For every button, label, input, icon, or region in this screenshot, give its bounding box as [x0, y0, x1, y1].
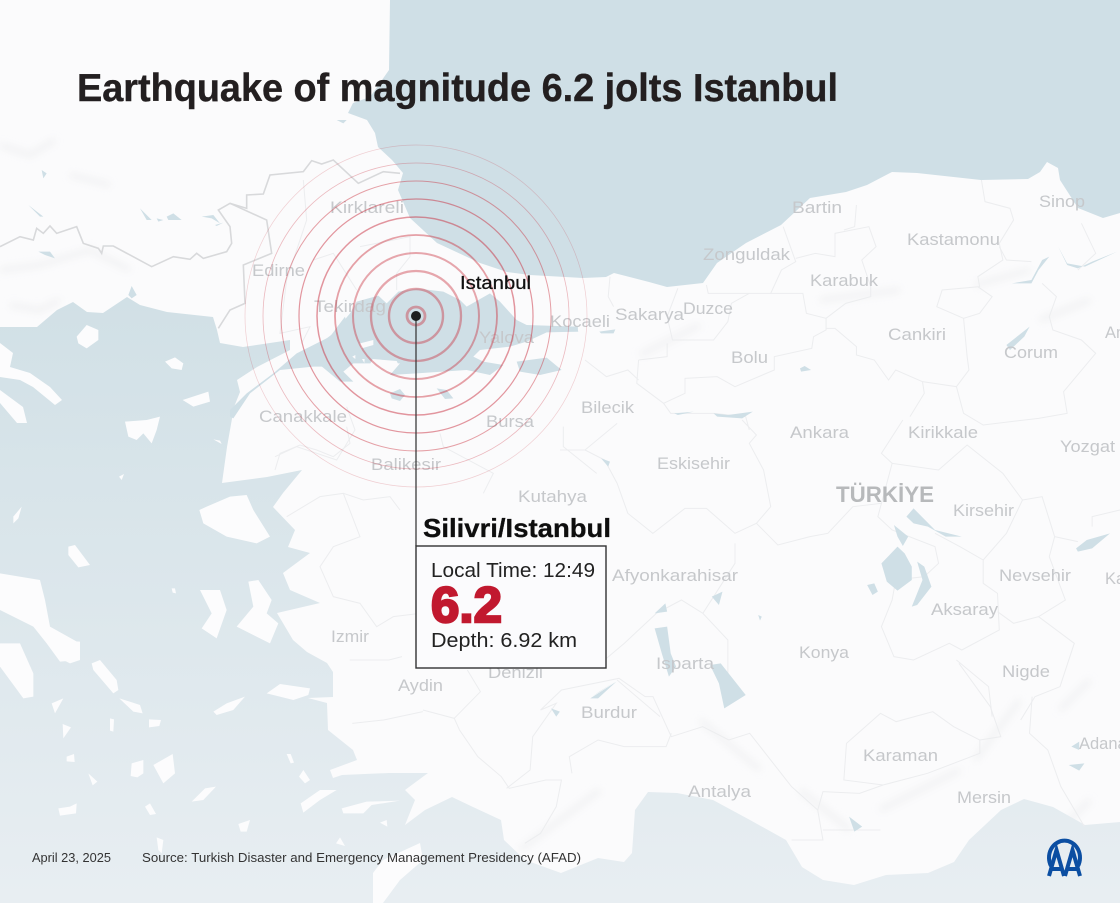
map: Black Sea	[348, 0, 1120, 287]
city labels: Nevsehir	[999, 567, 1072, 585]
city labels: Bilecik	[581, 399, 635, 417]
city labels: Karabuk	[810, 272, 879, 290]
city labels: Sinop	[1039, 193, 1085, 211]
city labels: Nigde	[1002, 663, 1050, 681]
label: Istanbul: Istanbul	[460, 273, 531, 293]
city labels: Karaman	[863, 747, 938, 765]
city labels: Kocaeli	[550, 313, 610, 331]
map: Rhodes	[373, 843, 423, 903]
country label: Türkiye: TÜRKİYE	[836, 482, 934, 507]
city labels: Kirsehir	[953, 502, 1015, 520]
map: hillshade	[0, 140, 1090, 850]
source: Source: Turkish Disaster and Emergency Management Presidency (AFAD)	[142, 850, 581, 865]
city labels: Yalova	[479, 329, 535, 347]
map: Sea of Marmara	[320, 288, 578, 401]
map: Dardanelles	[230, 317, 350, 418]
magnitude: 6.2	[431, 577, 502, 633]
city labels: Yozgat	[1060, 438, 1115, 456]
city labels: Cankiri	[888, 326, 946, 344]
map: Aegean and Mediterranean sea	[0, 297, 1120, 903]
icon: agency logo	[1049, 841, 1080, 876]
title: Earthquake of magnitude 6.2 jolts Istanbul	[77, 67, 838, 110]
callout box	[416, 546, 606, 668]
city labels: Sakarya	[615, 306, 685, 324]
city labels: Isparta	[656, 655, 715, 673]
epicentre dot	[411, 311, 421, 321]
city labels: Antalya	[688, 783, 752, 801]
city labels: Afyonkarahisar	[612, 567, 739, 585]
city labels: Corum	[1004, 344, 1058, 362]
city labels: Eskisehir	[657, 455, 731, 473]
city labels: Kirklareli	[330, 199, 404, 217]
depth: Depth: 6.92 km	[431, 630, 577, 652]
city labels: Aydin	[398, 677, 443, 695]
city labels: Aksaray	[931, 601, 999, 619]
city labels: Balikesir	[371, 456, 442, 474]
city labels: Tekirdag	[314, 298, 386, 316]
leader line	[415, 316, 417, 546]
local time: Local Time: 12:49	[431, 560, 595, 582]
seismic rings	[245, 145, 587, 487]
city labels: Kastamonu	[907, 231, 1000, 249]
city labels: Burdur	[581, 704, 638, 722]
city labels: Canakkale	[259, 408, 347, 426]
city labels: Ankara	[790, 424, 850, 442]
city labels	[252, 193, 1120, 807]
city labels: Konya	[799, 644, 850, 662]
city labels: Izmir	[331, 628, 370, 646]
city labels: Edirne	[252, 262, 305, 280]
city labels: Bolu	[731, 349, 768, 367]
city labels: Duzce	[683, 300, 733, 318]
map: Greek coast and islands	[0, 325, 423, 903]
city labels: Zonguldak	[703, 246, 791, 264]
map: lakes	[28, 120, 1117, 832]
city labels: Kirikkale	[908, 424, 978, 442]
city labels: Mersin	[957, 789, 1011, 807]
city labels: Bursa	[486, 413, 535, 431]
map: country borders	[0, 160, 400, 328]
date: April 23, 2025	[32, 850, 111, 865]
city labels: Denizli	[488, 664, 543, 682]
map: province borders	[275, 180, 1120, 843]
city labels: Kutahya	[518, 488, 588, 506]
callout heading: Silivri/Istanbul	[423, 513, 611, 543]
city labels: Bartin	[792, 199, 842, 217]
